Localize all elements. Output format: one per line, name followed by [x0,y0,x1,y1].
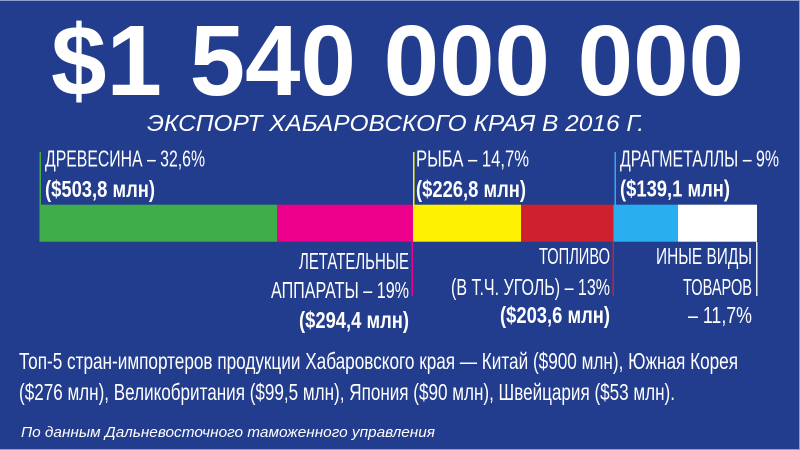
label: fuel [451,242,614,328]
label: aircraft: ЛЕТАТЕЛЬНЫЕ [299,248,409,274]
text block: top importers [19,348,738,405]
label: aircraft: ($294,4 млн) [299,307,409,333]
title: $1 540 000 000 [51,5,744,117]
label: fish: РЫБА – 14,7% [416,146,529,172]
label: aircraft: АППАРАТЫ – 19% [271,277,409,303]
label: timber: ($503,8 млн) [45,176,155,202]
label: other goods [656,242,758,328]
subtitle: ЭКСПОРТ ХАБАРОВСКОГО КРАЯ В 2016 Г. [147,110,644,136]
label: fuel: ($203,6 млн) [500,302,610,328]
label: fuel: ТОПЛИВО [539,243,610,269]
source note: По данным Дальневосточного таможенного управления [21,425,435,441]
label: aircraft [271,242,413,333]
label: other goods: ИНЫЕ ВИДЫ [656,243,752,269]
label: fish: ($226,8 млн) [416,176,526,202]
label: other goods: – 11,7% [688,302,752,328]
label: fuel: (В Т.Ч. УГОЛЬ) – 13% [451,274,610,300]
label: precious metals: ($139,1 млн) [620,176,730,202]
label: timber [40,146,205,205]
label: other goods: ТОВАРОВ [683,274,752,300]
label: precious metals [614,146,779,205]
label: fish [413,146,529,205]
label: timber: ДРЕВЕСИНА – 32,6% [45,146,205,172]
stacked bar chart [40,205,757,242]
